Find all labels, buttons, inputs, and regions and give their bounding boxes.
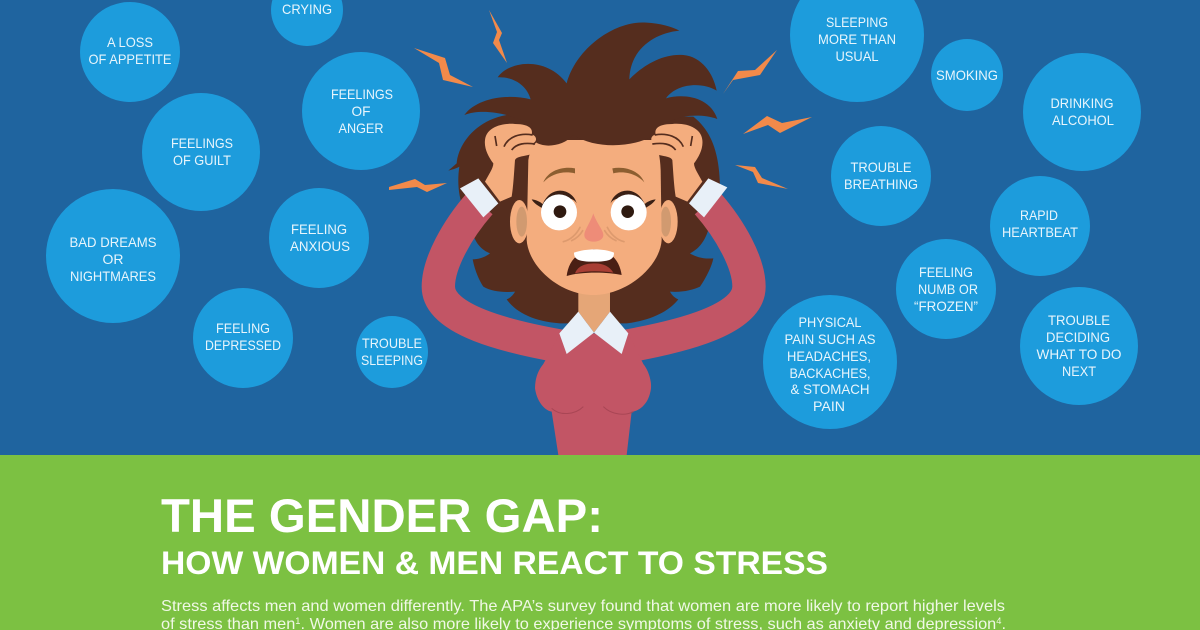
hand: left	[485, 124, 536, 202]
bubble: physical pain: HEADACHES,	[787, 348, 871, 364]
bubble: feeling anxious: FEELING	[291, 221, 347, 237]
bubble: feeling numb	[896, 239, 996, 339]
bubble: feelings of anger: OF	[352, 103, 370, 119]
bubble: trouble sleeping	[356, 316, 428, 388]
subtitle: HOW WOMEN & MEN REACT TO STRESS	[161, 545, 828, 581]
bubble: feelings of anger: ANGER	[338, 120, 384, 136]
bubble: bad dreams	[46, 189, 180, 323]
bubble: rapid heartbeat	[990, 176, 1090, 276]
bubble: sleeping more than usual: SLEEPING	[826, 14, 888, 30]
bubble: feeling numb: “FROZEN”	[914, 298, 978, 314]
back hair	[448, 115, 720, 323]
face	[527, 140, 662, 295]
bubble: drinking alcohol: DRINKING	[1050, 95, 1114, 111]
bubble: trouble breathing	[831, 126, 931, 226]
bubble: bad dreams: OR	[102, 251, 124, 267]
bubble: smoking: SMOKING	[936, 67, 998, 83]
bubble: a loss of appetite	[80, 2, 180, 102]
neck	[578, 287, 610, 333]
eye: right	[611, 191, 656, 230]
bubble: feeling numb: NUMB OR	[918, 281, 978, 297]
body text: 1	[295, 616, 301, 626]
illustration: stressed woman	[438, 22, 749, 455]
bubble: crying	[271, 0, 343, 46]
bubble: a loss of appetite: OF APPETITE	[88, 51, 172, 67]
top hair and fringe	[464, 22, 717, 146]
mouth	[567, 249, 622, 276]
bubble: feeling depressed: FEELING	[216, 320, 270, 336]
under-eye shadows	[563, 227, 624, 242]
bubble: trouble sleeping: SLEEPING	[361, 352, 423, 368]
bubble: bad dreams: BAD DREAMS	[70, 234, 156, 250]
panel: green background	[0, 455, 1200, 630]
bubble: trouble deciding: TROUBLE	[1048, 312, 1110, 328]
bubble: feeling anxious: ANXIOUS	[290, 238, 350, 254]
bubble: drinking alcohol	[1023, 53, 1141, 171]
hand: right	[651, 124, 702, 202]
bubble: a loss of appetite: A LOSS	[107, 34, 153, 50]
bubble: rapid heartbeat: RAPID	[1020, 207, 1058, 223]
arm: right	[624, 203, 749, 347]
bubble: physical pain: BACKACHES,	[790, 365, 870, 381]
panel: blue background	[0, 0, 1200, 456]
bubble: trouble deciding: WHAT TO DO	[1036, 346, 1122, 362]
bubble: rapid heartbeat: HEARTBEAT	[1002, 224, 1078, 240]
bubble: crying: CRYING	[282, 1, 332, 17]
bubble: trouble deciding: NEXT	[1062, 363, 1096, 379]
eye: left	[532, 191, 577, 230]
bubble: sleeping more than usual: USUAL	[836, 48, 879, 64]
bubble: trouble breathing: BREATHING	[844, 176, 918, 192]
bubble: feelings of anger	[302, 52, 420, 170]
bubble: trouble breathing: TROUBLE	[850, 159, 912, 175]
bubble: feeling numb: FEELING	[919, 264, 973, 280]
icon: stress lightning bolts	[389, 10, 812, 192]
bubble: feelings of anger: FEELINGS	[331, 86, 393, 102]
bubble: physical pain: PAIN	[813, 398, 845, 414]
body text: 4	[996, 616, 1001, 626]
bubble: feelings of guilt	[142, 93, 260, 211]
eyebrows	[543, 168, 644, 182]
bubble: drinking alcohol: ALCOHOL	[1052, 112, 1114, 128]
ears	[510, 200, 678, 243]
bubble: bad dreams: NIGHTMARES	[70, 268, 156, 284]
bubble: physical pain	[763, 295, 897, 429]
title: THE GENDER GAP:	[161, 489, 603, 542]
bubble: trouble deciding: DECIDING	[1046, 329, 1110, 345]
bubble: feeling depressed	[193, 288, 293, 388]
body text	[161, 598, 1006, 630]
body text: Stress affects men and women differently. The APA’s survey found that women are more likely to report higher levels	[161, 598, 1005, 615]
bubble: feeling anxious	[269, 188, 369, 288]
bubble: feeling depressed: DEPRESSED	[205, 337, 281, 353]
bubble: trouble deciding	[1020, 287, 1138, 405]
bubble: physical pain: PHYSICAL	[798, 314, 862, 330]
bubble: sleeping more than usual	[790, 0, 924, 102]
bubble: physical pain: PAIN SUCH AS	[784, 331, 876, 347]
collar	[559, 312, 628, 354]
bubble: trouble sleeping: TROUBLE	[362, 335, 422, 351]
sleeve cuffs	[460, 178, 727, 217]
bust fold lines	[552, 407, 633, 414]
bubble: feelings of guilt: OF GUILT	[173, 152, 231, 168]
arm: left	[438, 203, 563, 347]
bubble: physical pain: & STOMACH	[790, 381, 870, 397]
nose	[584, 213, 603, 242]
torso	[535, 333, 651, 455]
bubble: smoking	[931, 39, 1003, 111]
bubble: feelings of guilt: FEELINGS	[171, 135, 233, 151]
bubble: sleeping more than usual: MORE THAN	[818, 31, 896, 47]
